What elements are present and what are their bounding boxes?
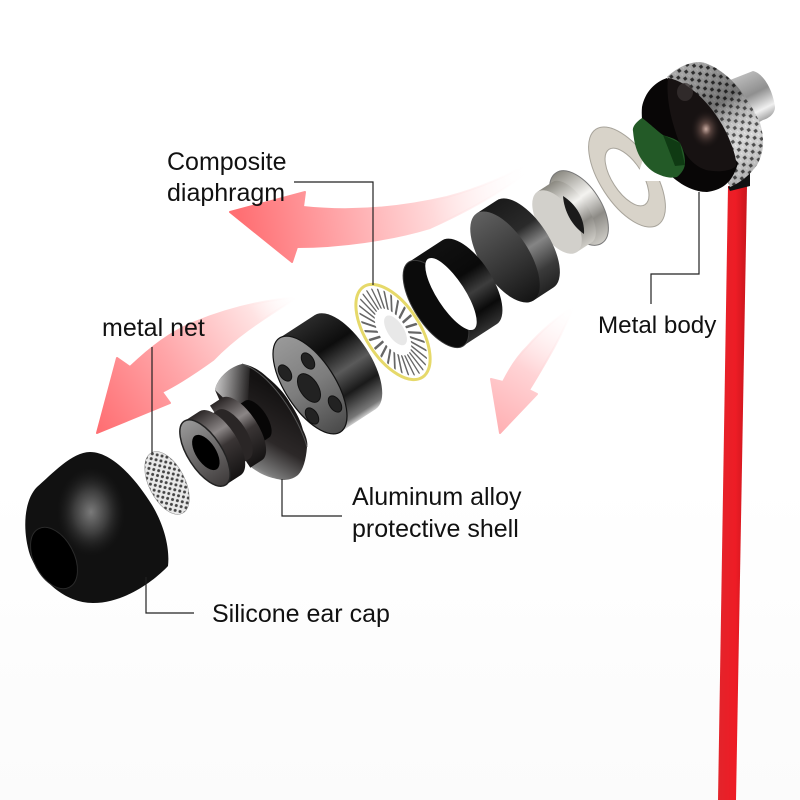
- inner rim: [390, 250, 482, 358]
- green insulation disc: [633, 118, 685, 178]
- silicone ear cap: [21, 452, 168, 603]
- flange dome: [215, 364, 307, 480]
- composite diaphragm: [341, 272, 445, 392]
- slot: [563, 196, 584, 234]
- block side: [280, 302, 397, 432]
- washer: C-shaped ring: [573, 114, 692, 240]
- dark disc magnet: [457, 187, 574, 314]
- leader line: aluminum shell: [282, 479, 342, 516]
- arrow: airflow right: [491, 306, 574, 433]
- gold ring: [341, 272, 445, 392]
- highlight: [57, 468, 125, 556]
- centre dome: [380, 312, 411, 349]
- cap body: [25, 452, 168, 603]
- outer band: [390, 228, 515, 358]
- aluminum alloy shell: [170, 302, 397, 494]
- metal net: [136, 445, 198, 521]
- dome highlight: [690, 109, 722, 149]
- label: composite diaphragm: diaphragm: [167, 179, 285, 207]
- holes: [275, 350, 345, 427]
- blades: [347, 278, 439, 386]
- red cable: [718, 186, 747, 800]
- rear flange: [538, 161, 620, 255]
- leader line: composite diaphragm: [294, 182, 373, 285]
- side: [477, 187, 574, 301]
- opening: [416, 251, 486, 337]
- metal body: earphone head: [642, 62, 775, 192]
- knurled ring: [667, 62, 763, 187]
- label: metal net: metal net: [102, 314, 205, 342]
- block face: [259, 324, 361, 446]
- upper sheen: [677, 83, 693, 101]
- glossy dome: [667, 78, 736, 171]
- leader line: metal net: [151, 347, 153, 453]
- label: aluminum alloy protective shell: Aluminum alloy: [352, 483, 522, 511]
- arrow: airflow top: [230, 162, 530, 262]
- label: composite diaphragm: Composite: [167, 148, 286, 176]
- black back body: [642, 78, 738, 192]
- front face: [522, 182, 592, 262]
- connector: [728, 173, 750, 191]
- arrow: airflow left: [97, 297, 298, 433]
- silver magnet holder: [522, 161, 620, 262]
- rear silver stem: [730, 71, 775, 130]
- leader line: ear cap: [146, 577, 194, 613]
- stepped nozzle: [170, 382, 286, 494]
- label: metal body: Metal body: [598, 312, 717, 339]
- label: silicone ear cap: Silicone ear cap: [212, 600, 390, 628]
- black ring: [390, 228, 515, 358]
- opening: [21, 519, 87, 597]
- leader line: metal body: [651, 192, 699, 304]
- label: aluminum alloy protective shell: protective shell: [352, 515, 519, 543]
- barrel: [537, 173, 605, 252]
- face: [457, 200, 553, 314]
